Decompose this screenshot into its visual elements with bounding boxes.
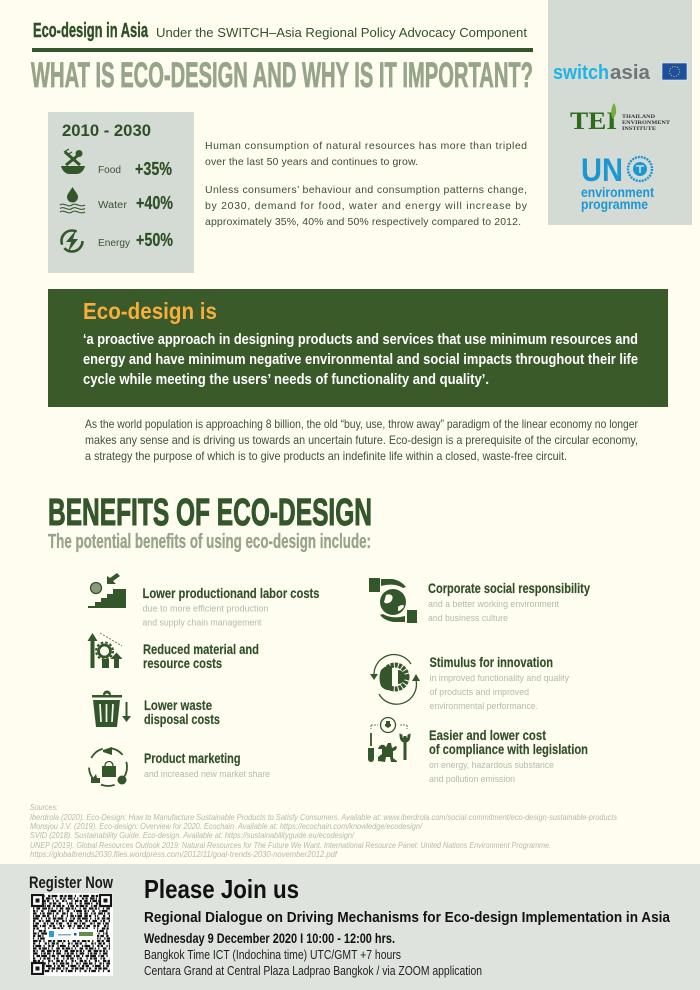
stat: water <box>98 193 173 213</box>
benefit: corporate social responsibility: and a better working environment <box>428 599 559 609</box>
panel: logos <box>548 0 692 225</box>
benefit: stimulus for innovation: Stimulus for innovation <box>430 655 553 670</box>
icon: water <box>60 187 85 213</box>
heading: benefits: BENEFITS OF ECO-DESIGN <box>48 492 372 534</box>
logo: switch asia: asia <box>610 62 651 84</box>
sources: https://globaltrends2030.files.wordpress.com/2012/11/goal-trends-2030-november2012.pdf <box>30 849 338 859</box>
benefit: product marketing <box>89 747 270 786</box>
definition text <box>83 332 638 388</box>
text block: human consumption: approximately 35%, 40% and 50% respectively compared to 2012. <box>205 216 521 228</box>
text block: circular economy <box>85 417 638 463</box>
benefit: stimulus for innovation: in improved functionality and quality <box>430 673 569 683</box>
logo: Thailand Environment Institute: THAILAND <box>622 115 655 120</box>
stat: water: Water <box>98 200 128 211</box>
logo: switch asia: switch <box>553 62 609 84</box>
text block: circular economy: makes any sense and is driving us towards an uncertain future. Eco-design is a prerequisite of the circular economy, <box>85 433 638 447</box>
text block: human consumption: by 2030, demand for food, water and energy will increase by <box>205 200 528 212</box>
logo: Thailand Environment Institute: ENVIRONMENT <box>622 121 671 126</box>
logo: UN environment programme: UN <box>581 152 623 188</box>
benefit: lower production costs: due to more efficient production <box>142 604 268 614</box>
text block: human consumption: over the last 50 years and continues to grow. <box>205 156 418 168</box>
benefit: easier compliance: Easier and lower cost <box>429 728 546 743</box>
event time zone: Bangkok Time ICT (Indochina time) UTC/GMT +7 hours <box>144 947 401 962</box>
benefit: corporate social responsibility <box>369 578 590 623</box>
logo: Thailand Environment Institute: TEI <box>570 108 617 135</box>
header <box>32 20 533 52</box>
benefit: product marketing: Product marketing <box>144 751 240 766</box>
logo: Thailand Environment Institute: INSTITUTE <box>622 127 657 132</box>
event date: Wednesday 9 December 2020 I 10:00 - 12:00 hrs. <box>144 931 395 946</box>
join heading: Please Join us <box>144 874 299 904</box>
text block: human consumption: Unless consumers’ behaviour and consumption patterns change, <box>205 184 527 196</box>
benefit: reduced material costs: resource costs <box>143 656 222 671</box>
QR code <box>30 893 113 976</box>
sources: Iberdrola (2020). Eco-Design: How to Manufacture Sustainable Products to Satisfy Consumers. Available at: www.iberdrola.com/social-commitment/eco-design-sustainable-products <box>30 812 618 822</box>
stat: water: +40% <box>136 193 173 213</box>
stat: energy: Energy <box>98 238 130 249</box>
text block: human consumption <box>205 140 528 228</box>
heading: Eco-design in Asia: Eco-design in Asia <box>33 20 149 42</box>
benefit: easier compliance: on energy, hazardous substance <box>429 760 554 770</box>
benefit: reduced material costs <box>88 633 259 671</box>
icon: marketing cycle <box>89 747 127 786</box>
benefit: lower waste <box>92 690 220 727</box>
benefit: corporate social responsibility: Corporate social responsibility <box>428 581 590 596</box>
register now: Register Now <box>29 873 114 892</box>
logo: UN environment programme: programme <box>581 196 648 212</box>
definition text: ‘a proactive approach in designing products and services that use minimum resources and <box>83 332 638 348</box>
benefit: lower waste: Lower waste <box>144 698 212 713</box>
icon: food <box>61 149 85 174</box>
panel: eco-design definition <box>48 289 668 407</box>
benefit: easier compliance: of compliance with legislation <box>429 742 588 757</box>
sources: UNEP (2019). Global Resources Outlook 2019: Natural Resources for The Future We Want. International Resource Panel: United Nations Environment Programme. <box>30 840 551 850</box>
stat: energy: +50% <box>136 230 173 250</box>
benefit: stimulus for innovation: of products and improved <box>430 687 529 697</box>
icon: waste bin <box>92 690 131 727</box>
benefit: lower production costs <box>88 573 320 628</box>
stat: food: +35% <box>135 159 172 179</box>
benefit: easier compliance: and pollution emission <box>429 774 515 784</box>
stat: energy <box>98 230 173 250</box>
text block: circular economy: a strategy the purpose of which is to give products an indefinite life within a closed, waste-free circuit. <box>85 449 567 463</box>
definition heading: Eco-design is <box>83 298 217 324</box>
icon: arrows and gear <box>88 633 122 668</box>
subheading: benefits: The potential benefits of using eco-design include: <box>48 531 371 553</box>
benefit: stimulus for innovation: environmental performance. <box>430 701 538 711</box>
benefit: lower production costs: and supply chain management <box>142 618 262 628</box>
benefit: stimulus for innovation <box>370 655 569 711</box>
subheading: SWITCH-Asia component: Under the SWITCH–Asia Regional Policy Advocacy Component <box>156 25 527 40</box>
event venue: Centara Grand at Central Plaza Ladprao Bangkok / via ZOOM application <box>144 963 482 978</box>
benefit: reduced material costs: Reduced material and <box>143 642 259 657</box>
panel: 2010-2030 statistics <box>48 112 194 273</box>
logo: switch asia <box>553 62 687 84</box>
sources <box>30 802 618 859</box>
icon: energy <box>62 230 82 252</box>
benefit: lower waste: disposal costs <box>144 712 220 727</box>
text block: human consumption: Human consumption of natural resources has more than tripled <box>205 140 527 152</box>
logo: Thailand Environment Institute <box>570 103 671 135</box>
sources: SVID (2018). Sustainability Guide. Eco-design. Available at: https://sustainabilityguide.eu/ecodesign/ <box>30 830 355 840</box>
logo: UN environment programme: environment <box>581 184 654 200</box>
logo: UN environment programme <box>581 152 654 212</box>
icon: brain gear cycle <box>370 655 420 704</box>
sources: Sources: <box>30 802 59 812</box>
definition text: energy and have minimum negative environmental and social impacts throughout their life <box>83 352 638 368</box>
benefit: easier compliance <box>368 718 588 784</box>
benefit: product marketing: and increased new market share <box>144 769 270 779</box>
stat: food: Food <box>98 165 121 176</box>
icon: hands and globe <box>369 578 417 623</box>
benefit: lower production costs: Lower productionand labor costs <box>142 586 320 601</box>
stats heading: 2010 - 2030 <box>62 121 151 140</box>
icon: tools and plant <box>368 718 410 762</box>
definition text: cycle while meeting the users’ needs of functionality and quality’. <box>83 372 489 388</box>
sources: Monsjou J.V. (2019). Eco-design: Overview for 2020. Ecochain. Available at: https://ecochain.com/knowledge/ecodesign/ <box>30 821 423 831</box>
panel: please join us <box>0 864 700 990</box>
benefit: corporate social responsibility: and business culture <box>428 613 508 623</box>
stat: food <box>98 159 172 179</box>
icon: stairs and coin <box>88 573 126 608</box>
